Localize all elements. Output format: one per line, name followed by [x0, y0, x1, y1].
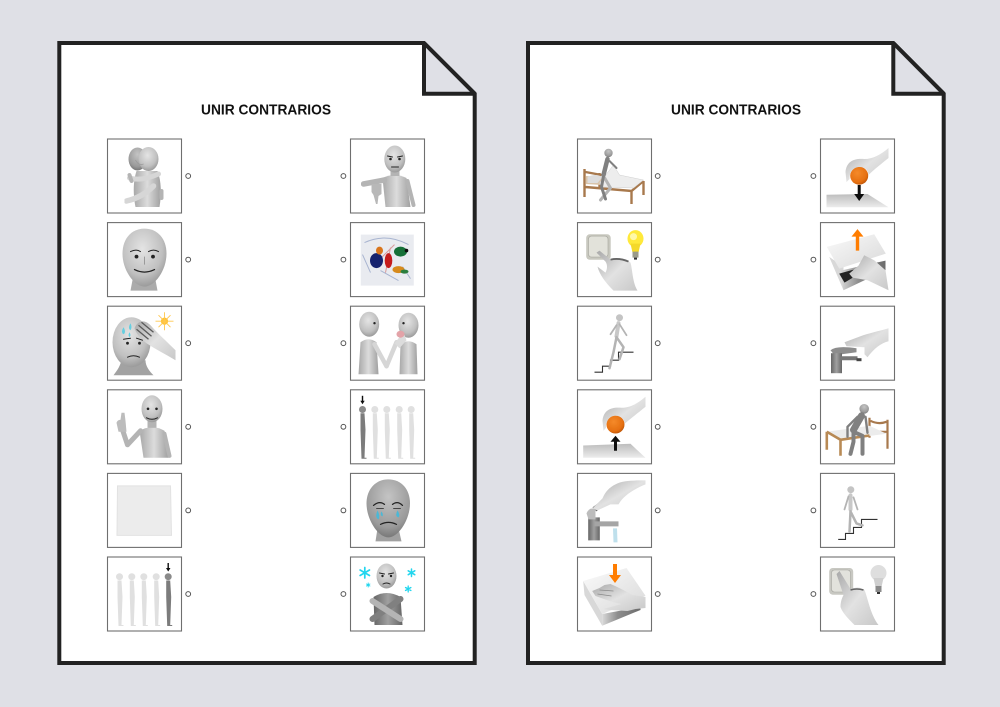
tile: thumbs down [350, 139, 424, 213]
tile: drop ball [820, 139, 894, 213]
page outline [59, 43, 475, 663]
connector dot [341, 508, 346, 513]
connector dot [341, 257, 346, 262]
title: UNIR CONTRARIOS [201, 102, 331, 118]
tile: switch on [578, 223, 652, 297]
tile: pick up ball [578, 390, 652, 464]
connector dot [655, 174, 660, 178]
connector dot [341, 341, 346, 346]
tile: switch off [820, 557, 894, 631]
tile: dirty cloth [350, 223, 424, 297]
connector dot [811, 341, 816, 346]
connector dot [811, 174, 816, 178]
connector dot [811, 424, 816, 429]
connector dot [341, 174, 346, 178]
panel: right worksheet [528, 43, 944, 663]
connector dot [186, 257, 191, 262]
connector dot [341, 424, 346, 429]
tile: first in line [350, 390, 424, 464]
connector dot [186, 174, 191, 178]
tile: slap [350, 306, 424, 380]
tile: getting out of bed [820, 390, 894, 464]
title: UNIR CONTRARIOS [671, 102, 801, 118]
connector dot [341, 592, 346, 596]
tile: going up stairs [578, 306, 652, 380]
connector dot [186, 508, 191, 513]
tile: smiling face [108, 223, 182, 297]
tile: hug [108, 139, 182, 213]
tile: close box [578, 557, 652, 631]
connector dot [655, 592, 660, 596]
folded corner [893, 43, 944, 94]
panel: left worksheet [59, 43, 475, 663]
connector dot [811, 508, 816, 513]
connector dot [186, 341, 191, 346]
tile: close tap [820, 306, 894, 380]
connector dot [811, 257, 816, 262]
tile: clean cloth [108, 473, 182, 547]
tile: thumbs up [108, 390, 182, 464]
tile: hot, sweating [108, 306, 182, 380]
tile: last in line [108, 557, 182, 631]
page outline [528, 43, 944, 663]
tile: open box [820, 223, 894, 297]
connector dot [655, 257, 660, 262]
tile: going down stairs [820, 473, 894, 547]
connector dot [186, 424, 191, 429]
folded corner [424, 43, 475, 94]
connector dot [186, 592, 191, 596]
tile: cold [350, 557, 424, 631]
connector dot [811, 592, 816, 596]
tile: getting into bed [578, 139, 652, 213]
connector dot [655, 341, 660, 346]
tile: crying face [350, 473, 424, 547]
tile: open tap [578, 473, 652, 547]
connector dot [655, 424, 660, 429]
connector dot [655, 508, 660, 513]
